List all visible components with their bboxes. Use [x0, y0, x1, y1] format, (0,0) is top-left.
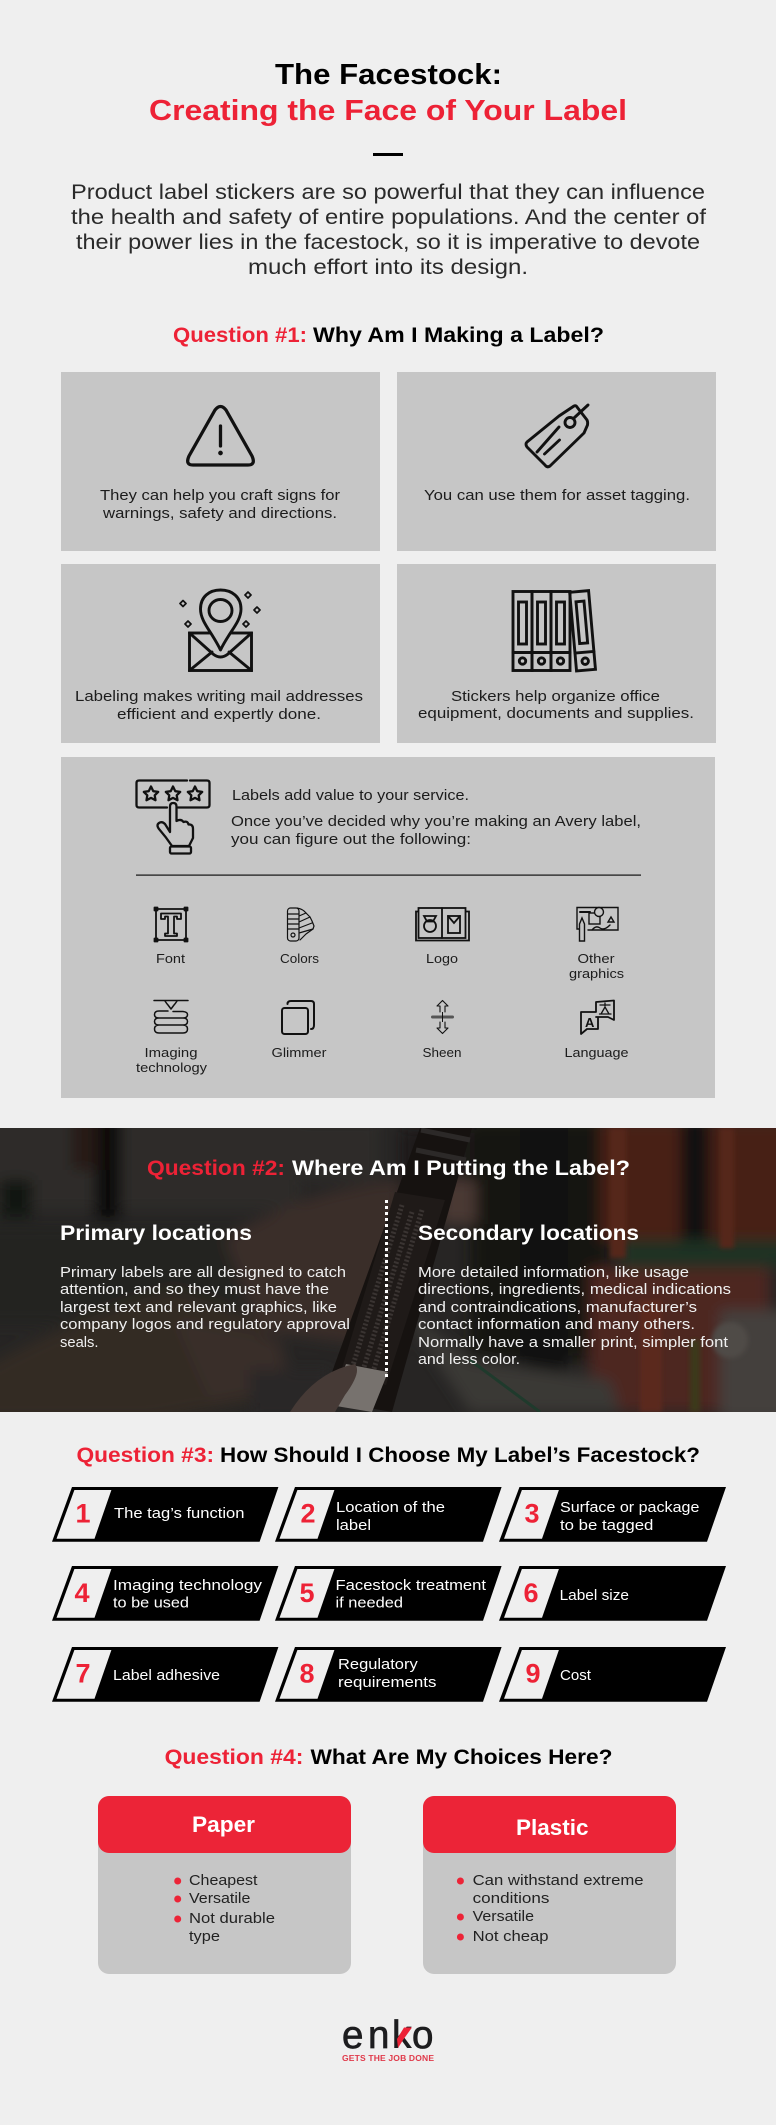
item: logo: Logo: [426, 952, 458, 966]
factor 2: Location of the: [336, 1500, 445, 1516]
text: warnings: [100, 488, 340, 522]
column: primary locations: company logos and regulatory approval: [60, 1316, 350, 1333]
factor 8: requirements: [338, 1675, 436, 1691]
icon: logo book: [416, 908, 469, 940]
factor 1: [52, 1487, 278, 1542]
column: secondary locations: More detailed information, like usage: [418, 1264, 689, 1281]
card header: plastic: [423, 1796, 676, 1853]
column: secondary locations: contact information and many others.: [418, 1316, 695, 1333]
panel: asset tagging: [397, 372, 716, 551]
factor 5: Facestock treatment: [336, 1578, 486, 1594]
column: primary locations: Primary labels are all designed to catch: [60, 1264, 346, 1281]
text: service value: you can figure out the following:: [231, 832, 471, 848]
column: secondary locations: and contraindications, manufacturer’s: [418, 1299, 697, 1316]
intro paragraph: their power lies in the facestock, so it is imperative to devote: [76, 230, 700, 254]
item: logo: [416, 908, 469, 966]
icon: imaging printer layers: [154, 1000, 188, 1033]
factor 3: 3: [524, 1499, 540, 1529]
text: service value: Labels add value to your service.: [232, 788, 469, 804]
text: service value: [231, 788, 641, 848]
icon: translation bubbles: A: [585, 1015, 595, 1030]
title: Creating the Face of Your Label: [149, 95, 627, 127]
background photo: bottle on shelf: [0, 1128, 776, 1412]
intro paragraph: Product label stickers are so powerful that they can influence: [71, 180, 705, 204]
title: The Facestock:: [275, 59, 502, 91]
list: paper properties: type: [189, 1928, 220, 1945]
item: other graphics: [569, 908, 624, 981]
card: paper: [98, 1796, 351, 1974]
column: primary locations: attention, and so they must have the: [60, 1281, 329, 1298]
text: mail addresses: [75, 689, 363, 723]
icon: board with shapes and pencil: [577, 908, 618, 941]
factor 5: if needed: [336, 1596, 403, 1612]
title divider: [373, 153, 403, 156]
heading: question 2: [147, 1156, 630, 1180]
item: imaging technology: Imaging: [144, 1046, 198, 1060]
item: language: [564, 1000, 629, 1060]
column: primary locations: [60, 1221, 350, 1351]
panel: office organization: [397, 564, 716, 743]
factor 2: label: [336, 1518, 371, 1534]
intro paragraph: the health and safety of entire populations. And the center of: [71, 205, 706, 229]
icon: tag: [526, 405, 588, 467]
heading: question 1: Question #1:: [173, 323, 307, 347]
factor 8: 8: [299, 1659, 315, 1689]
item: glimmer: Glimmer: [272, 1046, 326, 1060]
text: warnings: warnings, safety and directions.: [102, 506, 337, 522]
column: primary locations: largest text and relevant graphics, like: [60, 1299, 337, 1316]
factor 1: 1: [75, 1499, 91, 1529]
thumb and paper slip: [338, 1364, 388, 1412]
heading: question 2: Where Am I Putting the Label?: [292, 1156, 630, 1180]
column: primary locations: Primary locations: [60, 1221, 252, 1245]
factor 4: [52, 1566, 278, 1621]
heading: question 4: What Are My Choices Here?: [310, 1745, 612, 1769]
factor 8: [275, 1647, 502, 1702]
icon: overlapping squares: [282, 1001, 314, 1034]
factor 6: [499, 1566, 726, 1621]
list: paper properties: Versatile: [189, 1890, 250, 1907]
factor 7: 7: [75, 1659, 91, 1689]
dotted divider: [385, 1200, 388, 1380]
factor 2: 2: [300, 1499, 316, 1529]
heading: question 4: Question #4:: [165, 1745, 303, 1769]
factor 8: Regulatory: [338, 1657, 419, 1673]
icon: binders: [513, 591, 595, 671]
item: sheen: Sheen: [422, 1046, 462, 1060]
icon: color swatch fan: [288, 908, 314, 941]
item: colors: Colors: [280, 952, 319, 966]
text: warnings: They can help you craft signs for: [100, 488, 340, 504]
item: colors: [280, 908, 319, 966]
bottle: [322, 1128, 472, 1412]
factor 3: to be tagged: [560, 1518, 653, 1534]
item: sheen: [422, 1000, 462, 1060]
text: asset tagging: You can use them for asset tagging.: [424, 488, 690, 504]
column: secondary locations: Secondary locations: [418, 1221, 639, 1245]
factor 4: 4: [74, 1578, 90, 1608]
panel: where to put the label: [0, 1128, 776, 1412]
factor 9: Cost: [560, 1668, 591, 1684]
item: font: Font: [156, 952, 186, 966]
column: primary locations: seals.: [60, 1334, 98, 1351]
item: language: Language: [564, 1046, 629, 1060]
factor 7: [52, 1647, 278, 1702]
card header: paper: [98, 1796, 351, 1853]
factor 6: 6: [523, 1578, 539, 1608]
intro paragraph: [71, 180, 706, 279]
list: plastic properties: Not cheap: [473, 1928, 549, 1945]
item: imaging technology: technology: [136, 1061, 208, 1075]
heading: question 1: [173, 323, 604, 347]
column: secondary locations: directions, ingredients, medical indications: [418, 1281, 731, 1298]
list: paper properties: [174, 1872, 275, 1945]
heading: question 3: Question #3:: [76, 1443, 214, 1467]
factor 9: 9: [525, 1659, 541, 1689]
heading: question 1: Why Am I Making a Label?: [313, 323, 604, 347]
heading: question 4: [165, 1745, 612, 1769]
list: plastic properties: Can withstand extreme: [473, 1872, 644, 1889]
factor 1: The tag’s function: [114, 1506, 244, 1522]
column: secondary locations: and less color.: [418, 1351, 520, 1368]
list: plastic properties: conditions: [473, 1890, 549, 1907]
column: secondary locations: [418, 1221, 731, 1368]
panel: warnings: [61, 372, 380, 551]
text: office organization: Stickers help organize office: [451, 689, 660, 705]
factor 7: Label adhesive: [113, 1668, 220, 1684]
list: plastic properties: Versatile: [473, 1908, 534, 1925]
list: paper properties: Not durable: [189, 1910, 275, 1927]
icon: warning triangle: [188, 406, 253, 465]
icon: star rating with pointing hand: [136, 780, 210, 854]
factor 5: 5: [299, 1578, 315, 1608]
heading: question 3: How Should I Choose My Label’s Facestock?: [220, 1443, 700, 1467]
list: paper properties: Cheapest: [189, 1872, 258, 1889]
factor 4: Imaging technology: [113, 1578, 263, 1594]
intro paragraph: much effort into its design.: [248, 255, 528, 279]
text: mail addresses: efficient and expertly done.: [117, 707, 321, 723]
list: plastic properties: [457, 1872, 644, 1945]
text: service value: Once you’ve decided why you’re making an Avery label,: [231, 814, 641, 830]
factor 5: [275, 1566, 502, 1621]
icon: font: [154, 908, 188, 942]
card: plastic: [423, 1796, 676, 1974]
text: mail addresses: Labeling makes writing mail addresses: [75, 689, 363, 705]
item: other graphics: Other: [578, 952, 614, 966]
column: secondary locations: Normally have a smaller print, simpler font: [418, 1334, 729, 1351]
icon: vertical arrows with bar: [431, 1000, 454, 1034]
item: font: [154, 908, 188, 966]
factor 3: [499, 1487, 726, 1542]
card header: plastic: Plastic: [516, 1815, 588, 1840]
title: [149, 59, 627, 127]
logo: enko: GETS THE JOB DONE: [342, 2053, 434, 2063]
text: office organization: [418, 689, 694, 722]
item: imaging technology: [136, 1000, 208, 1075]
factor 6: Label size: [560, 1588, 629, 1604]
icon: pin and envelope: [180, 590, 260, 670]
photo darkening overlay: [0, 1128, 776, 1412]
card header: paper: Paper: [192, 1812, 255, 1837]
heading: question 2: Question #2:: [147, 1156, 285, 1180]
panel: service value and following choices: [61, 757, 715, 1098]
factor 2: [275, 1487, 502, 1542]
logo: enko: enko: [342, 2014, 433, 2057]
panel: mail addresses: [61, 564, 380, 743]
factor 4: to be used: [113, 1596, 189, 1612]
item: glimmer: [272, 1001, 326, 1060]
text: office organization: equipment, documents and supplies.: [418, 706, 694, 722]
factor 9: [499, 1647, 726, 1702]
item: other graphics: graphics: [569, 967, 624, 981]
factor 3: Surface or package: [560, 1500, 699, 1516]
